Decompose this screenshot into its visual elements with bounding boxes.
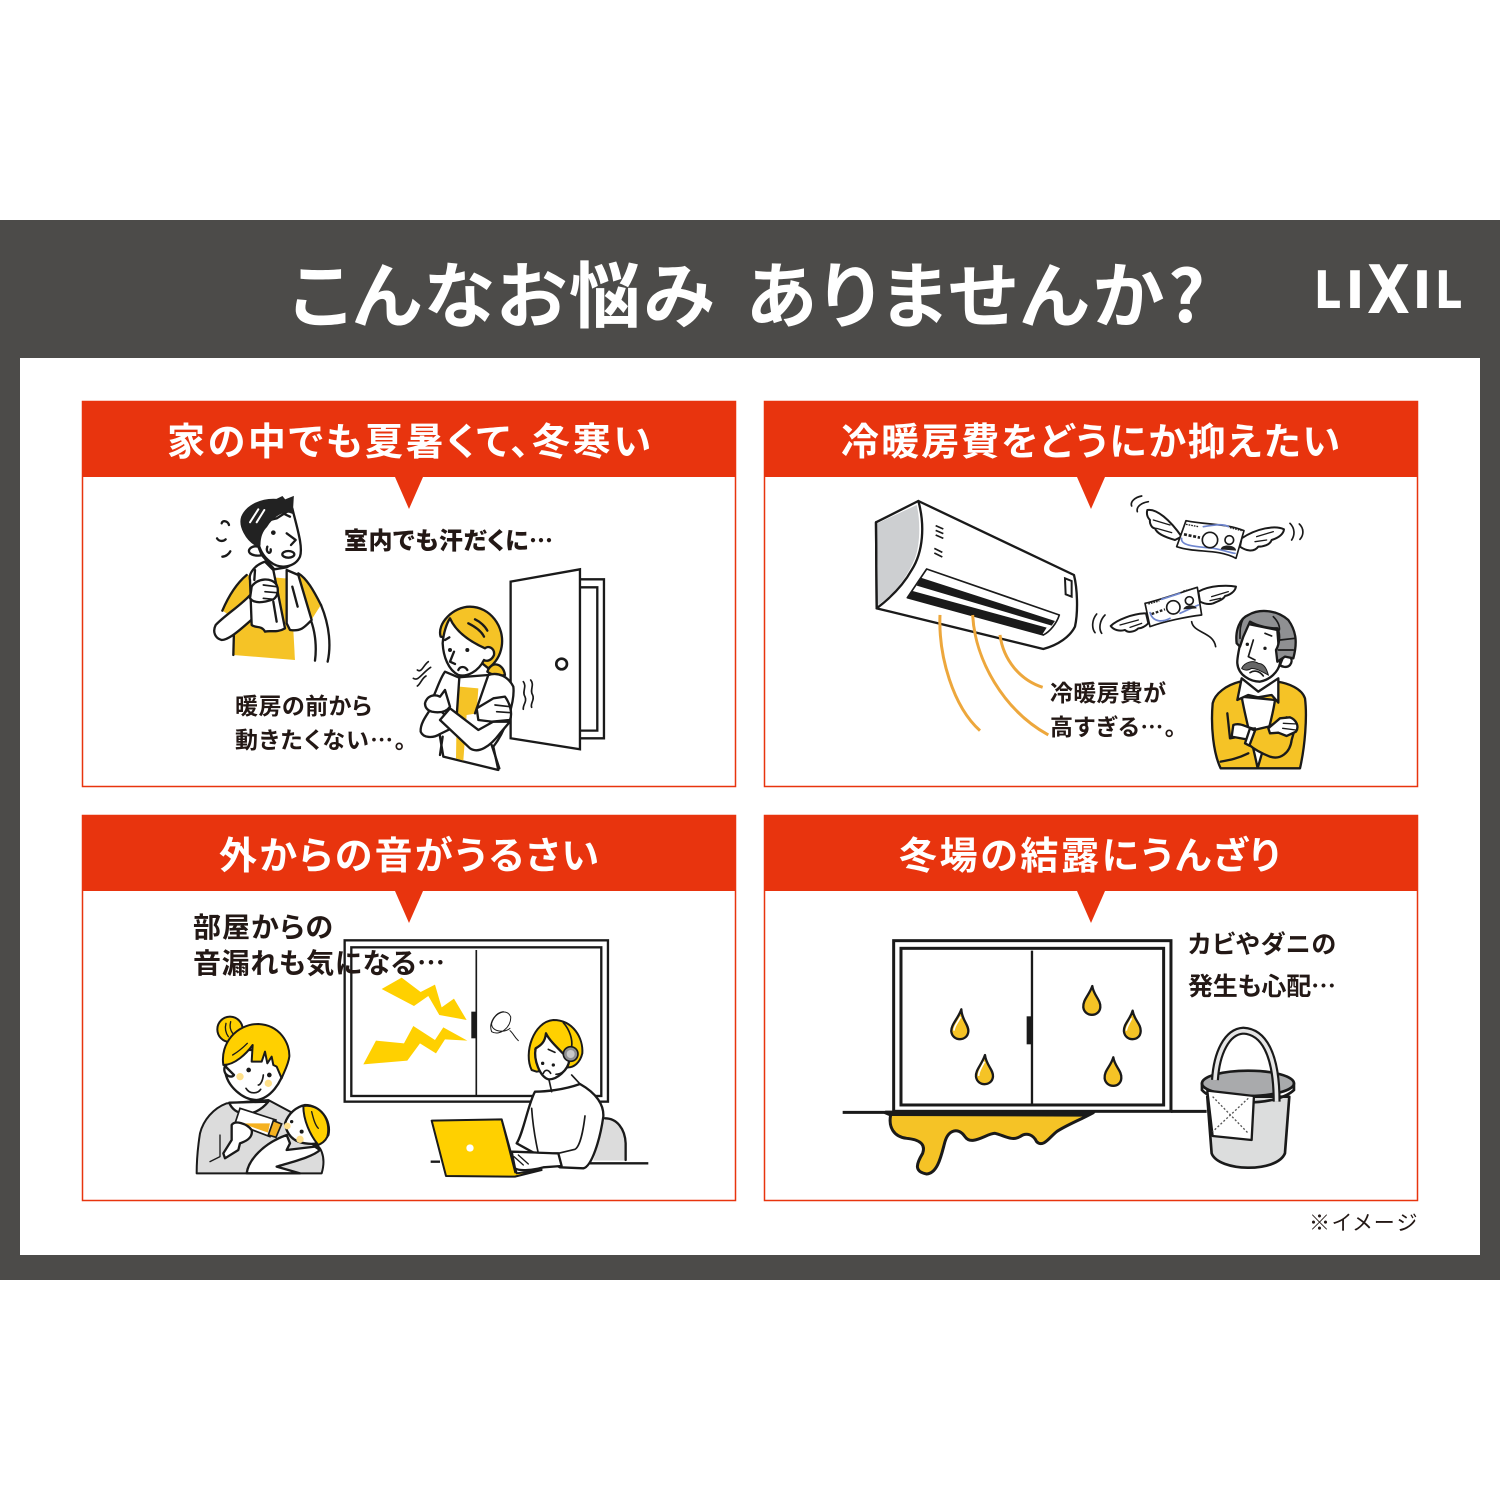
illustration: window with noise bolts bbox=[345, 940, 608, 1102]
panel: heating and cooling cost bbox=[764, 401, 1418, 786]
caption: mold and mites: 発生も心配… bbox=[1188, 967, 1336, 1003]
panel 1 header band bbox=[82, 401, 736, 477]
panel 3 border bbox=[82, 816, 736, 1200]
logo: LIXIL: X bbox=[1367, 251, 1410, 329]
panel: hot and cold house bbox=[82, 401, 736, 786]
illustration: door bbox=[511, 569, 604, 749]
title: こんなお悩み bbox=[290, 238, 714, 343]
caption: cost too high bbox=[1050, 674, 1176, 742]
caption: sound leakage bbox=[193, 906, 445, 982]
panel 2 border bbox=[764, 402, 1418, 786]
illustration: air conditioner with warm air bbox=[876, 501, 1077, 735]
logo: LIXIL: L bbox=[1314, 261, 1341, 321]
panel: winter condensation bbox=[764, 815, 1418, 1200]
caption: sound leakage: 部屋からの bbox=[193, 906, 333, 946]
dark frame background bbox=[0, 220, 1500, 1280]
panel: outside noise bbox=[82, 815, 736, 1200]
caption: sound leakage: 音漏れも気になる… bbox=[193, 942, 445, 982]
panel 2 pointer bbox=[1077, 477, 1105, 509]
logo: LIXIL: I bbox=[1346, 261, 1364, 321]
caption: cost too high: 高すぎる…。 bbox=[1050, 708, 1176, 742]
caption: cost too high: 冷暖房費が bbox=[1050, 674, 1166, 708]
panel 1 border bbox=[82, 402, 736, 786]
note: image only: ※イメージ bbox=[1309, 1207, 1417, 1237]
illustration: bucket with cloth bbox=[1202, 1031, 1294, 1168]
panel 3 header band bbox=[82, 815, 736, 891]
illustration: shivering woman bbox=[413, 607, 514, 770]
illustration: mother feeding baby bbox=[197, 1017, 329, 1173]
caption: cannot leave heater: 動きたくない…。 bbox=[235, 721, 406, 755]
illustration: frowning older man bbox=[1212, 611, 1306, 768]
logo: LIXIL: I bbox=[1412, 261, 1432, 321]
panel 1 pointer bbox=[395, 477, 423, 509]
illustration: woman at laptop with headset bbox=[431, 1012, 648, 1177]
white content area bbox=[20, 358, 1480, 1255]
illustration: window with droplets bbox=[843, 941, 1207, 1112]
logo: LIXIL bbox=[1314, 251, 1462, 329]
illustration: puddle of water on the floor bbox=[885, 1111, 1098, 1174]
logo: LIXIL: L bbox=[1435, 261, 1462, 321]
caption: sweating indoors: 室内でも汗だくに… bbox=[344, 521, 553, 556]
panel 3 heading: 外からの音がうるさい bbox=[219, 825, 599, 880]
illustration: worried curved line bbox=[1192, 622, 1216, 647]
caption: cannot leave heater bbox=[235, 687, 406, 755]
illustration: flying banknotes bbox=[1093, 496, 1303, 633]
panel 1 heading: 家の中でも夏暑くて、冬寒い bbox=[167, 411, 651, 466]
caption: mold and mites: カビやダニの bbox=[1188, 925, 1336, 961]
panel 2 header band bbox=[764, 401, 1418, 477]
panel 4 heading: 冬場の結露にうんざり bbox=[899, 825, 1280, 880]
panel 4 border bbox=[764, 816, 1418, 1200]
title: ありませんか? bbox=[746, 238, 1205, 343]
panel 2 heading: 冷暖房費をどうにか抑えたい bbox=[841, 411, 1340, 466]
caption: mold and mites bbox=[1188, 925, 1336, 1003]
panel 4 pointer bbox=[1077, 891, 1105, 923]
panel 4 header band bbox=[764, 815, 1418, 891]
caption: cannot leave heater: 暖房の前から bbox=[235, 687, 372, 721]
title bbox=[290, 238, 1205, 343]
illustration: sweating man with towel bbox=[214, 497, 329, 662]
panel 3 pointer bbox=[395, 891, 423, 923]
